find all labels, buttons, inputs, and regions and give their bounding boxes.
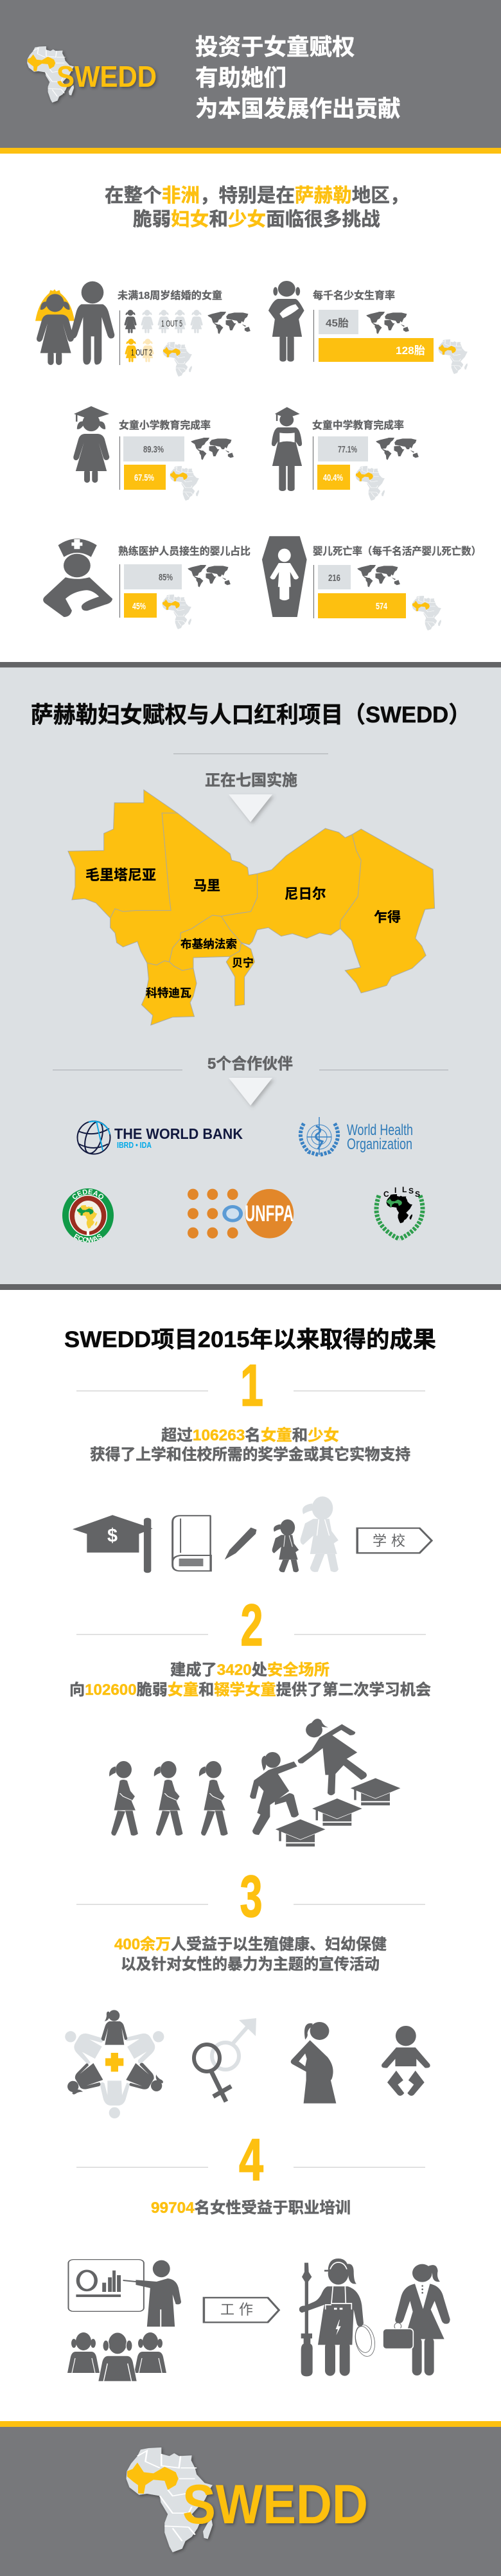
heading: child marriage: 未满18周岁结婚的女童 [118,289,222,301]
map: africa [162,595,191,629]
result 3 [58,1864,430,2118]
map: seven Sahel countries [68,790,435,1025]
challenges heading: 在整个非洲，特别是在萨赫勒地区， [105,185,409,206]
country: Burkina Faso [170,915,242,970]
icon: girls climbing [109,1719,400,1847]
logo: World Bank [77,1120,243,1156]
text: vocational training: 99704名女性受益于职业培训 [151,2199,351,2217]
map: world [376,438,419,460]
country: Chad [340,829,435,993]
country: Benin [226,943,255,1006]
icon: girl with cap [73,406,109,483]
map: world [191,438,234,460]
panel: child marriage [35,282,251,377]
result 1 [73,1353,432,1573]
arrow: down [229,794,272,822]
logo: World Bank: THE WORLD BANK [114,1125,243,1142]
result 2 [69,1593,431,1847]
text: scholarships [90,1426,410,1463]
text: scholarships: 超过106263名女童和少女 [161,1426,339,1444]
logo: UNFPA [188,1189,294,1239]
icon: business woman [383,2264,450,2375]
icon: worker woman [299,2258,378,2376]
text: scholarships: 获得了上学和住校所需的奖学金或其它实物支持 [90,1445,410,1463]
number 2: 2 [240,1593,263,1658]
heading: birth rate: 每千名少女生育率 [313,289,395,301]
bar: world 45 [319,310,358,334]
map: africa [412,596,441,631]
subheading: seven countries: 正在七国实施 [205,772,297,789]
map labels: 尼日尔 [285,886,326,902]
icon: pen [225,1528,256,1560]
sign: work [204,2298,279,2322]
logo: CILSS [376,1185,423,1239]
heading: skilled attendance: 熟练医护人员接生的婴儿占比 [118,545,251,557]
text: awareness [114,1936,387,1973]
header banner [0,0,501,154]
map: africa [163,342,192,377]
sign: school [357,1528,432,1553]
bar: world 89.3% [123,436,184,461]
icons: 1 out of 2 [125,339,154,362]
bar: sahel 40.4%: 40.4% [323,472,343,483]
bar: sahel 574 [318,593,406,618]
icon: circle of people with cross [58,2010,171,2118]
subheading: partners: 5个合作伙伴 [207,1055,293,1073]
bar: world 89.3%: 89.3% [143,444,164,455]
bar: sahel 574: 574 [376,601,387,612]
country: Niger [221,828,361,945]
icons: 1 out of 5: 1 OUT 5 [161,318,182,328]
country: Mauritania [68,790,177,918]
icon: scholarship cap [73,1515,153,1573]
panel: skilled birth attendance [43,539,251,629]
section title: results: SWEDD项目2015年以来取得的成果 [64,1327,436,1352]
header title [195,34,401,121]
icon: baby [382,2026,430,2096]
map: world [188,565,231,587]
map labels: 布基纳法索 [180,938,237,951]
bar: world 216: 216 [328,573,340,584]
map: africa [438,339,468,374]
map labels [85,867,401,999]
logo: CILSS: CILSS [383,1185,420,1199]
bar: world 77.1% [318,436,368,461]
challenges heading: 脆弱妇女和少女面临很多挑战 [133,209,380,230]
logo: ECOWAS: ECOWAS [73,1233,102,1242]
bar: world 85%: 85% [159,572,173,583]
bar: world 216 [318,565,351,589]
map labels: 马里 [193,879,220,893]
footer logo: SWEDD [182,2474,368,2536]
header logo: SWEDD [57,60,157,93]
icon: bride and groom [35,282,114,365]
bar: sahel 128 [319,338,434,362]
icon: girl with baby [268,281,304,362]
footer banner [0,2421,501,2576]
heading: secondary education: 女童中学教育完成率 [312,419,404,431]
bar: sahel 67.5%: 67.5% [134,472,154,483]
icon: coffin [262,536,307,617]
logo: ECOWAS [62,1188,114,1242]
logo: WHO: Organization [347,1136,412,1153]
sign: school: 学校 [373,1533,410,1549]
icon: three girls [67,2332,166,2381]
bar: sahel 45%: 45% [132,601,146,612]
map: world [207,312,251,334]
result 4 [67,2127,450,2381]
arrow: down [229,1078,272,1105]
number 3: 3 [240,1864,262,1929]
footer logo [127,2447,368,2552]
logo: World Bank: IBRD • IDA [117,1140,152,1150]
panel: infant mortality [262,536,481,631]
icons: 1 out of 5 [125,310,203,333]
number 1: 1 [240,1353,263,1418]
map labels: 乍得 [374,910,401,925]
logo: WHO: World Health [347,1122,413,1139]
bar: sahel 128: 128胎 [396,344,425,357]
sign: work: 工作 [220,2302,258,2318]
challenges heading [105,185,409,230]
icon: small girl with backpack [272,1519,299,1572]
heading: primary education: 女童小学教育完成率 [119,419,211,431]
map: world [366,312,409,334]
map: africa [170,466,199,501]
icon: scholarship cap: $ [107,1525,118,1546]
heading: infant mortality: 婴儿死亡率（每千名活产婴儿死亡数） [313,545,481,557]
panel: SWEDD project [0,662,501,1290]
bar: world 45: 45胎 [326,318,349,329]
map: world [357,565,400,587]
bar: sahel 45% [124,593,157,618]
map labels: 毛里塔尼亚 [85,867,156,883]
icons: 1 out of 2: 1 OUT 2 [131,347,152,357]
number 4: 4 [239,2127,263,2193]
header logo [27,46,157,103]
bar: sahel 67.5% [124,465,166,490]
logo: UNFPA: UNFPA [245,1201,294,1226]
icon: presenter and board [68,2260,181,2327]
bar: sahel 40.4% [317,465,350,490]
icon: book [173,1516,211,1571]
icon: nurse with baby [43,539,112,617]
map: africa [355,466,385,501]
text: awareness: 以及针对女性的暴力为主题的宣传活动 [121,1956,380,1973]
section title: 萨赫勒妇女赋权与人口红利项目（SWEDD） [31,702,471,728]
header title: 有助她们 [195,65,286,91]
panel: secondary education [272,407,419,501]
text: awareness: 400余万人受益于以生殖健康、妇幼保健 [114,1936,387,1953]
map labels: 贝宁 [232,956,254,969]
country: Cote d'Ivoire [141,961,197,1025]
text: safe spaces: 建成了3420处安全场所 [170,1661,330,1679]
map labels: 科特迪瓦 [146,987,191,999]
icon: pregnant woman [291,2022,336,2104]
panel: adolescent birth rate [268,281,468,374]
icon: gender symbols [194,2018,256,2102]
panel: primary education [73,406,234,501]
bar: world 85% [124,564,182,589]
text: safe spaces: 向102600脆弱女童和辍学女童提供了第二次学习机会 [69,1681,431,1699]
bar: world 77.1%: 77.1% [338,444,357,455]
logo: WHO [301,1117,413,1155]
icon: girl reading [272,407,302,491]
text: safe spaces [69,1661,431,1699]
country: Mali [110,813,257,965]
logo: ECOWAS: CEDEAO [72,1189,104,1199]
header title: 为本国发展作出贡献 [195,96,401,121]
icon: big girl with backpack [301,1496,338,1572]
header title: 投资于女童赋权 [195,34,355,60]
